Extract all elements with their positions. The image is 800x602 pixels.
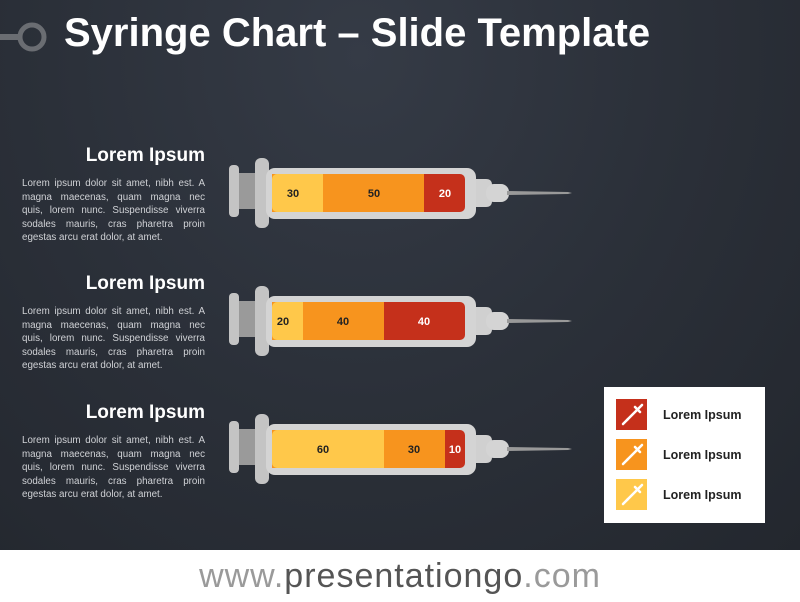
syringe 1 — [229, 158, 572, 228]
syringe 2: 20 — [277, 316, 289, 328]
icon: title syringe ring — [0, 22, 46, 52]
text block 3: egestas arcu erat dolor, at amet. — [22, 489, 163, 500]
text block 1: Lorem Ipsum — [86, 145, 205, 166]
text block 1: sodales mauris, cras pharetra proin — [22, 218, 205, 230]
footer: www.presentationgo.com — [199, 557, 601, 595]
syringe 2 — [229, 286, 572, 356]
text block 1: quis, lorem nunc. Suspendisse viverra — [22, 205, 205, 216]
syringe 1: 50 — [368, 188, 380, 200]
legend item: orange — [616, 439, 742, 470]
text block 3: sodales mauris, cras pharetra proin — [22, 476, 205, 486]
text block 2: Lorem ipsum dolor sit amet, nibh est. A — [22, 306, 205, 317]
legend item: red: Lorem Ipsum — [663, 408, 742, 422]
text block 3: magna maecenas, quam magna nec — [22, 448, 205, 460]
legend item: yellow: Lorem Ipsum — [663, 488, 742, 502]
text block 3: quis, lorem nunc. Suspendisse viverra — [22, 462, 205, 473]
syringe 2: 40 — [418, 316, 430, 328]
syringe 3 — [229, 414, 572, 484]
text block 2: magna maecenas, quam magna nec — [22, 320, 205, 330]
legend item: red — [616, 399, 742, 430]
syringe 2: 40 — [337, 316, 349, 328]
text block 2: Lorem Ipsum — [86, 273, 205, 294]
text block 2 — [22, 273, 205, 371]
text block 2: sodales mauris, cras pharetra proin — [22, 346, 205, 358]
legend — [604, 387, 765, 523]
syringe 1: 20 — [439, 188, 451, 200]
text block 3 — [22, 402, 205, 500]
text block 1 — [22, 145, 205, 243]
text block 3: Lorem ipsum dolor sit amet, nibh est. A — [22, 435, 205, 446]
legend item: yellow — [616, 479, 742, 510]
syringe 3: 10 — [449, 444, 461, 456]
text block 2: quis, lorem nunc. Suspendisse viverra — [22, 333, 205, 344]
syringe 3: 30 — [408, 444, 420, 456]
syringe 3: 60 — [317, 444, 329, 456]
legend item: orange: Lorem Ipsum — [663, 448, 742, 462]
text block 1: magna maecenas, quam magna nec — [22, 192, 205, 202]
text block 1: egestas arcu erat dolor, at amet. — [22, 232, 163, 243]
text block 2: egestas arcu erat dolor, at amet. — [22, 360, 163, 371]
footer — [0, 550, 800, 600]
text block 1: Lorem ipsum dolor sit amet, nibh est. A — [22, 178, 205, 189]
title: Syringe Chart – Slide Template — [64, 11, 650, 55]
syringe 1: 30 — [287, 188, 299, 200]
text block 3: Lorem Ipsum — [86, 402, 205, 423]
